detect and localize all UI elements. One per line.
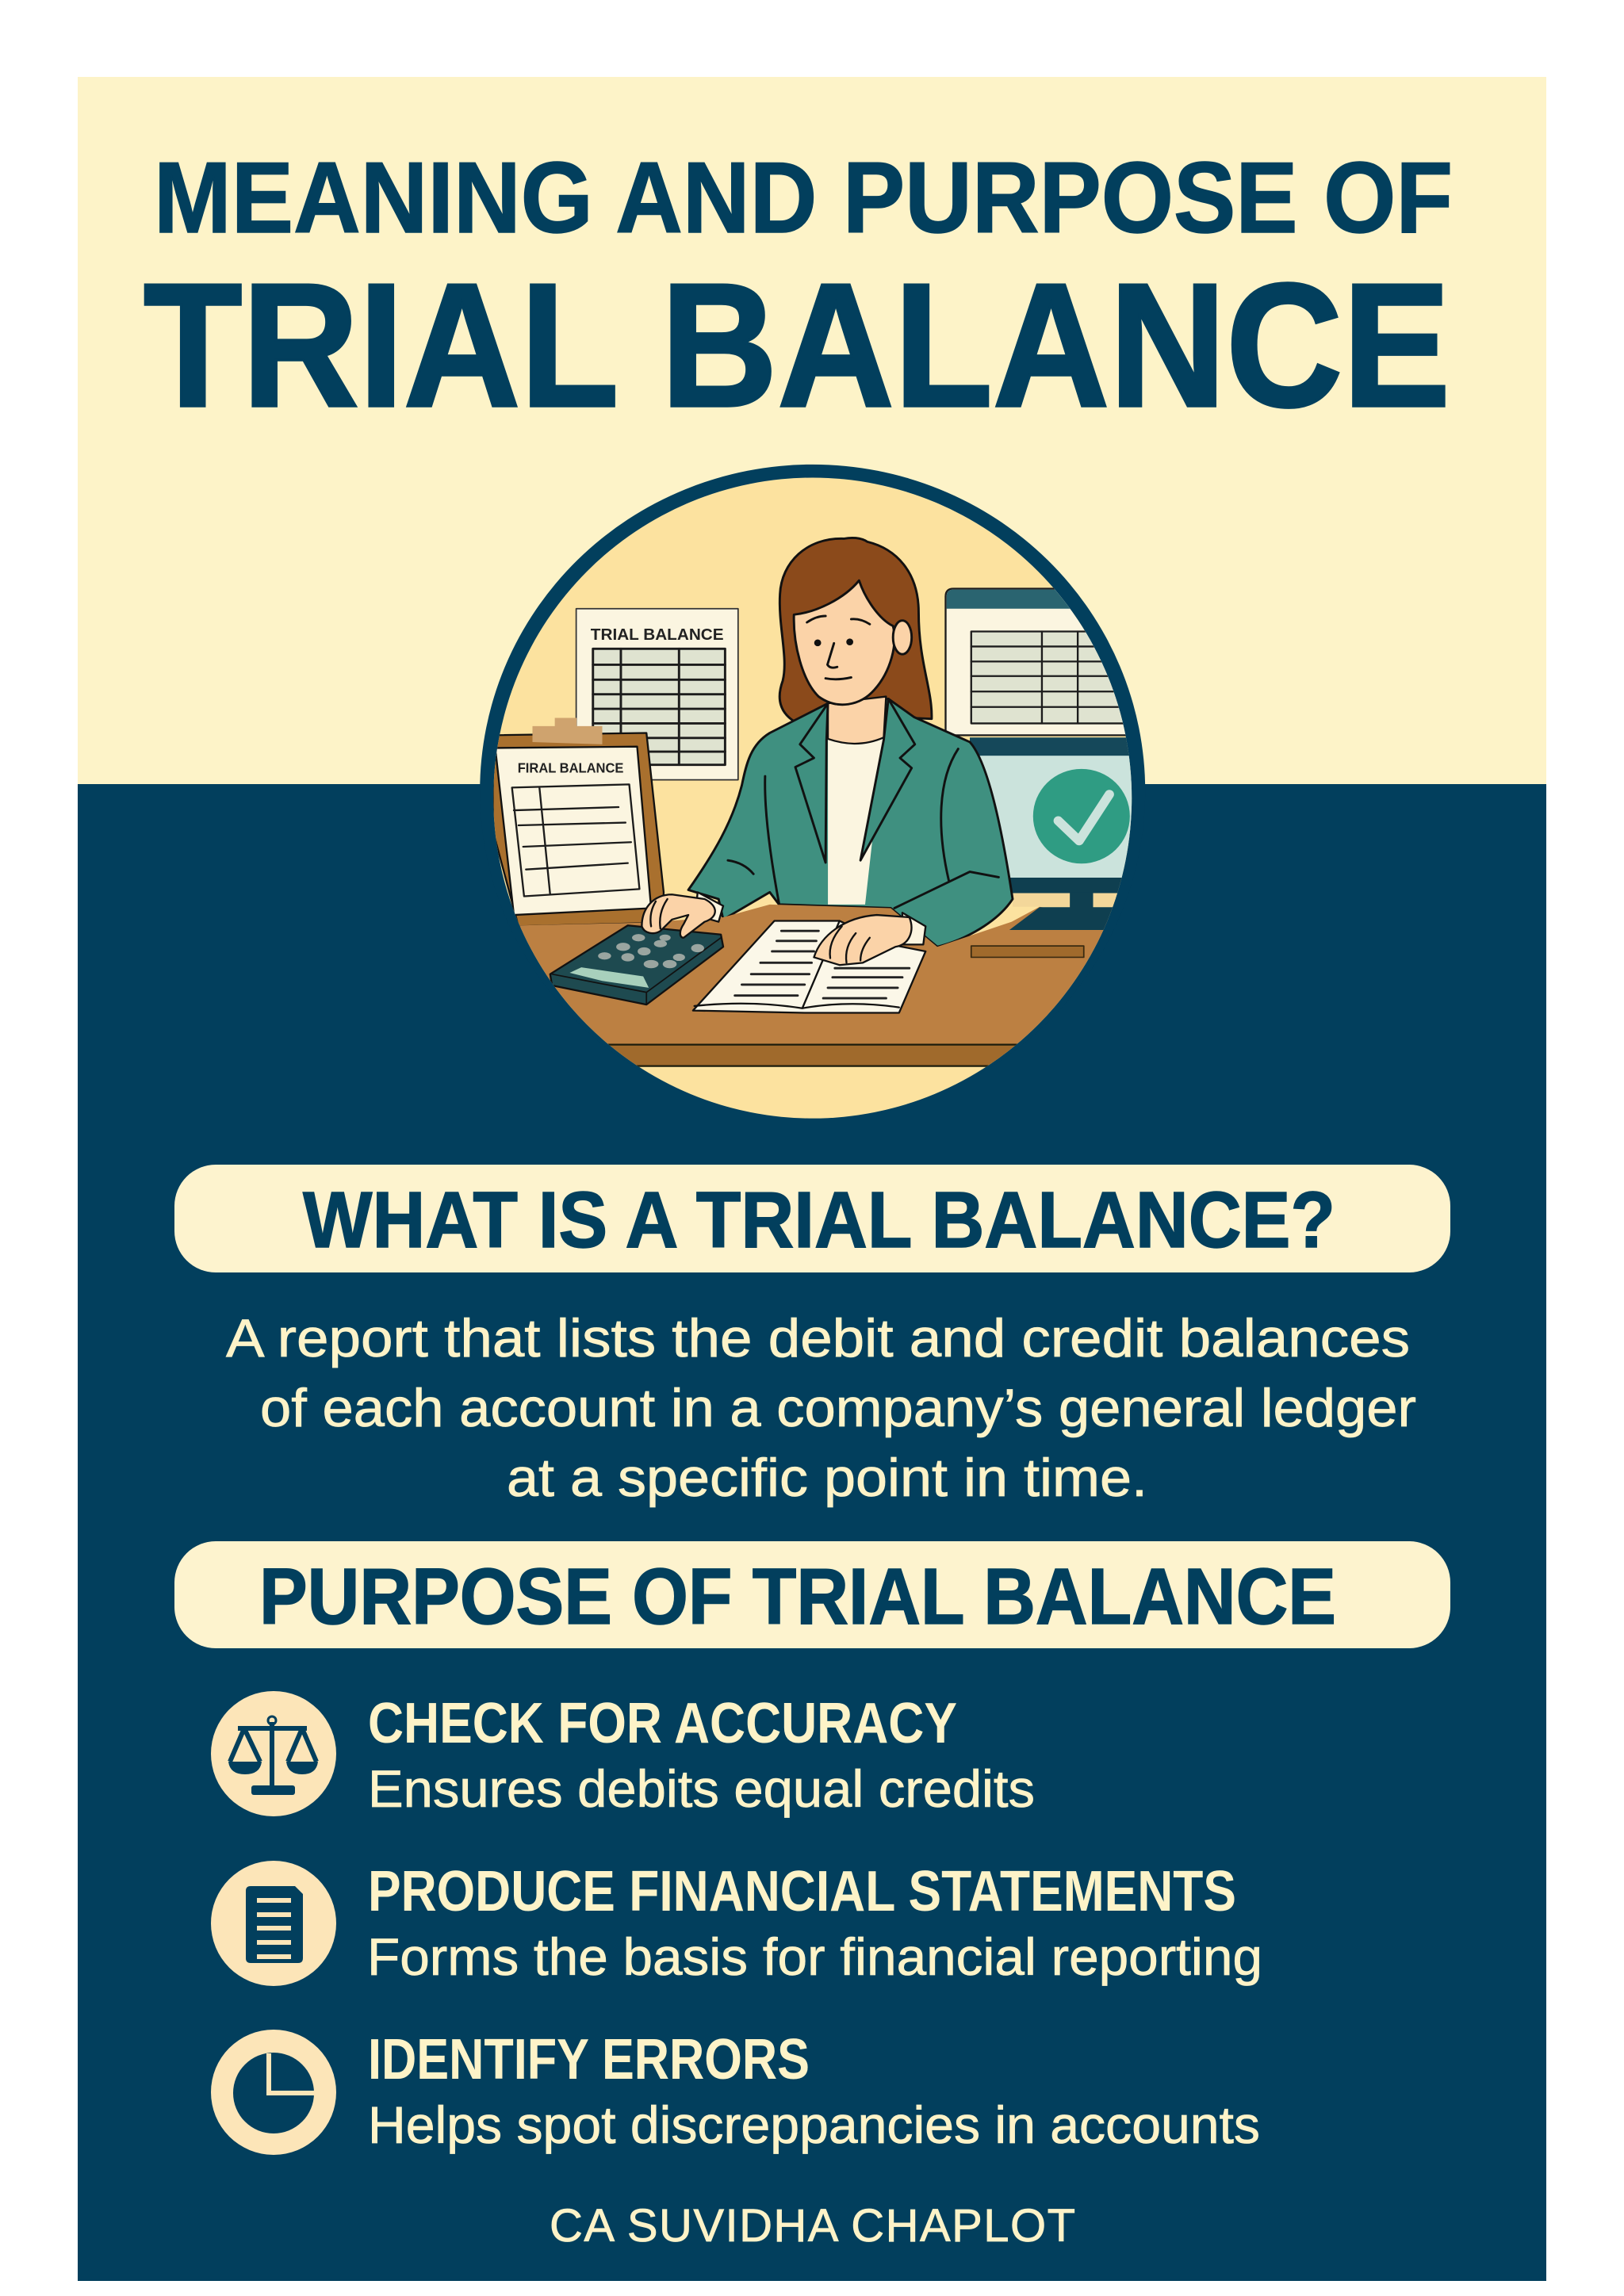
wall — [472, 467, 1161, 1127]
item one text — [368, 1692, 1035, 1818]
item two text: PRODUCE FINANCIAL STATEMENTS — [368, 1860, 1236, 1923]
shirt — [828, 739, 883, 905]
clipboard: FIRAL BALANCE — [518, 760, 623, 775]
item one text: CHECK FOR ACCURACY — [368, 1692, 957, 1755]
neck — [828, 697, 886, 744]
wall poster: trial balance: TRIAL BALANCE — [591, 626, 724, 644]
jacket seams — [728, 749, 998, 908]
calculator — [550, 925, 723, 1004]
hair — [779, 538, 932, 723]
definition line one: A report that lists the debit and credit balances — [226, 1308, 1410, 1368]
clipboard — [493, 718, 664, 926]
definition line three: at a specific point in time. — [507, 1448, 1147, 1508]
item one text: Ensures debits equal credits — [368, 1759, 1035, 1818]
title line two: TRIAL BALANCE — [144, 247, 1450, 444]
left hand and cuff — [642, 892, 723, 938]
item three text — [368, 2028, 1260, 2154]
circle scene — [472, 467, 1161, 1127]
item three text: Helps spot discreppancies in accounts — [368, 2095, 1260, 2154]
pill heading: purpose of trial balance: PURPOSE OF TRIAL BALANCE — [259, 1552, 1336, 1641]
monitor stand — [1009, 892, 1119, 930]
title — [144, 141, 1453, 444]
wall poster: trial balance — [576, 609, 738, 780]
desk pen tray — [971, 946, 1084, 957]
desk — [519, 904, 1109, 1067]
icon: pie chart — [211, 2030, 336, 2155]
facial features — [807, 616, 870, 679]
circle ring — [480, 465, 1145, 1118]
illustration: accountant at desk in circle — [472, 465, 1161, 1127]
item two text — [367, 1860, 1262, 1986]
open book — [693, 921, 925, 1012]
panel: navy lower background — [78, 784, 1546, 2281]
spreadsheet window — [944, 587, 1126, 736]
ear — [893, 621, 912, 654]
face — [794, 580, 894, 705]
icon: balance scales — [211, 1691, 336, 1816]
icon: document — [211, 1861, 336, 1986]
definition line two: of each account in a company’s general ledger — [260, 1378, 1416, 1438]
panel: cream header background — [78, 77, 1546, 784]
right hand and cuff — [814, 913, 925, 965]
item three text: IDENTIFY ERRORS — [368, 2028, 810, 2091]
pill heading: what is a trial balance: WHAT IS A TRIAL BALANCE? — [303, 1176, 1335, 1265]
definition text — [226, 1308, 1416, 1508]
footer author credit: CA SUVIDHA CHAPLOT — [550, 2200, 1075, 2252]
monitor with check mark — [970, 737, 1132, 907]
item two text: Forms the basis for financial reporting — [367, 1927, 1262, 1986]
check badge — [1033, 769, 1130, 863]
jacket lapels — [795, 698, 915, 863]
title line one: MEANING AND PURPOSE OF — [154, 141, 1453, 254]
jacket — [688, 698, 1013, 947]
